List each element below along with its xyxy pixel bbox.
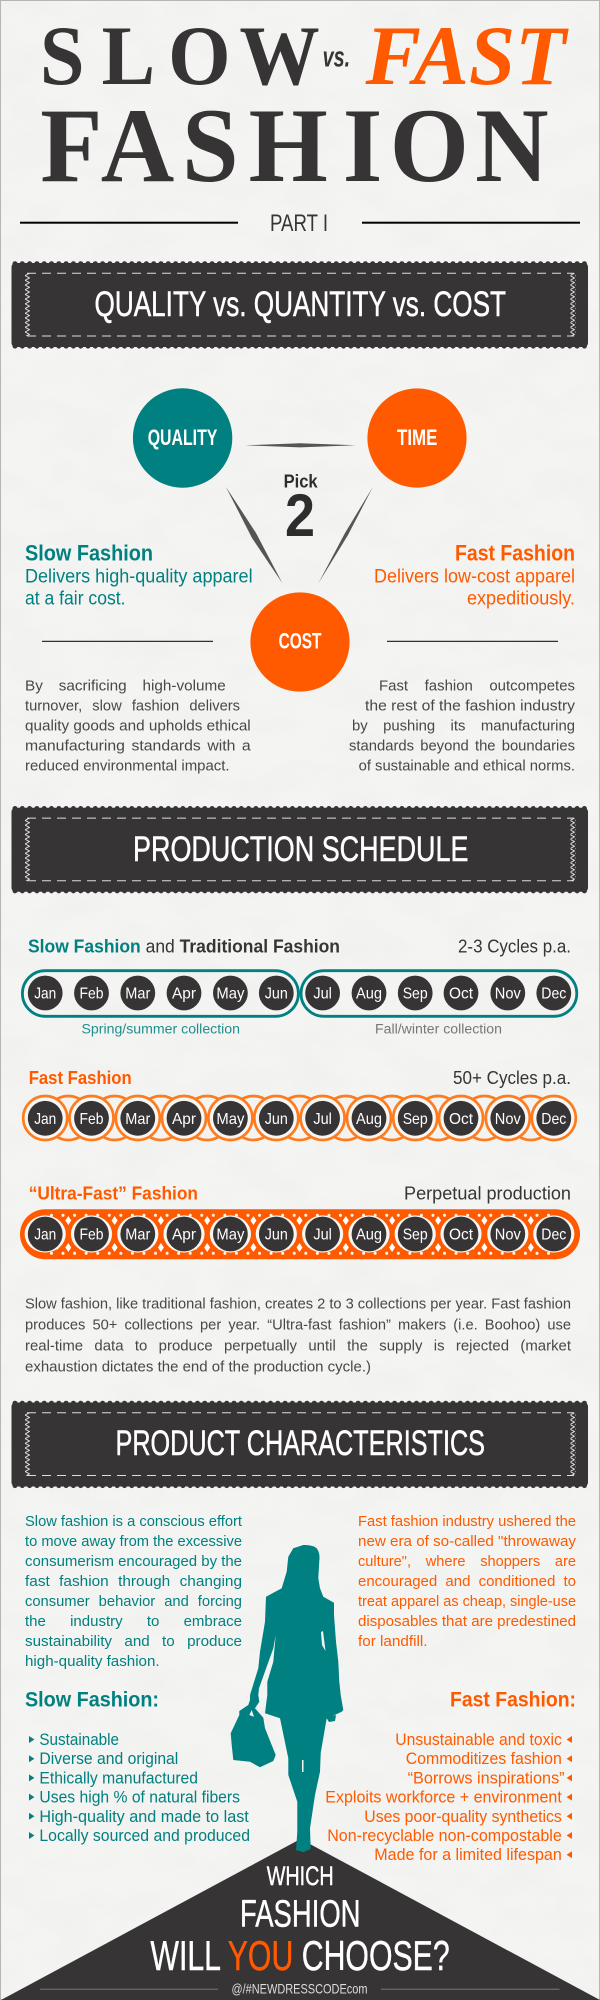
calendar row: fast fashion: Oct bbox=[449, 1111, 474, 1128]
slow fashion list: Ethically manufactured bbox=[39, 1769, 198, 1787]
fast fashion summary: Delivers low-cost apparel bbox=[374, 567, 575, 588]
calendar row: ultra-fast fashion: Oct bbox=[449, 1227, 474, 1244]
title word: SLOW: SLOW bbox=[40, 9, 320, 102]
calendar row: ultra-fast fashion: Jun bbox=[265, 1227, 288, 1244]
connector: quality to cost bbox=[226, 487, 282, 583]
fast fashion intro paragraph: encouraged and conditioned to bbox=[358, 1573, 576, 1590]
cycle count: 50+: 50+ Cycles p.a. bbox=[453, 1067, 571, 1088]
title: fashion: FASHION bbox=[40, 87, 549, 204]
calendar row: fast fashion: May bbox=[216, 1111, 244, 1128]
calendar row: ultra-fast fashion: Apr bbox=[172, 1227, 197, 1244]
production label: perpetual: Perpetual production bbox=[404, 1182, 571, 1203]
part label with rules: PART I bbox=[270, 210, 328, 237]
calendar row: fast fashion bbox=[23, 1096, 576, 1140]
closing question: WHICH bbox=[267, 1861, 334, 1891]
closing triangle panel bbox=[1, 1839, 600, 2000]
production schedule paragraph: produces 50+ collections per year. “Ultra-fast fashion” makers (i.e. Boohoo) use bbox=[25, 1317, 571, 1333]
fast fashion list: Unsustainable and toxic bbox=[395, 1731, 562, 1749]
calendar row: ultra-fast fashion: Jul bbox=[313, 1227, 332, 1244]
calendar row: slow fashion: Mar bbox=[125, 986, 151, 1003]
circle: cost bbox=[250, 592, 350, 692]
production schedule paragraph: Slow fashion, like traditional fashion, creates 2 to 3 collections per year. Fast fashion bbox=[25, 1296, 571, 1312]
title word: FAST: FAST bbox=[365, 10, 569, 103]
fast fashion paragraph: of sustainable and ethical norms. bbox=[359, 759, 575, 775]
fast fashion intro paragraph bbox=[358, 1513, 576, 1650]
heading banner: production schedule: PRODUCTION SCHEDULE bbox=[133, 830, 468, 869]
circle: time bbox=[367, 388, 467, 488]
heading banner: product characteristics bbox=[12, 1402, 588, 1486]
label: spring/summer: Spring/summer collection bbox=[82, 1021, 240, 1036]
heading banner: production schedule bbox=[12, 808, 588, 892]
fast fashion list: Made for a limited lifespan bbox=[374, 1846, 562, 1864]
fast fashion summary: Fast Fashion bbox=[455, 541, 575, 566]
slow fashion paragraph: turnover, slow fashion delivers bbox=[25, 699, 240, 715]
calendar row: fast fashion: Sep bbox=[403, 1111, 428, 1128]
calendar row: slow fashion: Apr bbox=[172, 986, 197, 1003]
production schedule paragraph: real-time data to produce perpetually until the supply is rejected (market bbox=[25, 1338, 571, 1354]
fast fashion intro paragraph: Fast fashion industry ushered the bbox=[358, 1513, 576, 1530]
icon: woman silhouette with shopping bag bbox=[231, 1545, 343, 1852]
slow fashion intro paragraph: fast fashion through changing bbox=[25, 1573, 242, 1590]
heading banner: quality vs quantity vs cost bbox=[12, 263, 588, 347]
slow fashion paragraph: quality goods and upholds ethical bbox=[25, 719, 251, 735]
calendar row: ultra-fast fashion: Nov bbox=[495, 1227, 521, 1244]
calendar row: slow fashion: May bbox=[216, 986, 244, 1003]
calendar row: fast fashion: Nov bbox=[495, 1111, 521, 1128]
fast fashion intro paragraph: for landfill. bbox=[358, 1633, 428, 1650]
calendar row: fast fashion: Jul bbox=[313, 1111, 332, 1128]
slow fashion intro paragraph: consumerism encouraged by the bbox=[25, 1553, 242, 1570]
calendar row: fast fashion: Feb bbox=[80, 1111, 104, 1128]
fast fashion list: Uses poor-quality synthetics bbox=[364, 1808, 562, 1826]
circle: cost: COST bbox=[279, 629, 322, 654]
fast fashion paragraph: the rest of the fashion industry bbox=[365, 699, 576, 715]
calendar row: ultra-fast fashion: Mar bbox=[125, 1227, 151, 1244]
calendar row: slow fashion: Feb bbox=[80, 986, 104, 1003]
calendar row: slow fashion: Sep bbox=[403, 986, 428, 1003]
calendar row: fast fashion: Jun bbox=[265, 1111, 288, 1128]
calendar row: slow fashion: Jul bbox=[313, 986, 332, 1003]
slow fashion intro paragraph: sustainability and to produce bbox=[25, 1633, 242, 1650]
production schedule paragraph: exhaustion dictates the end of the production cycle.) bbox=[25, 1359, 371, 1375]
fast fashion intro paragraph: new era of so-called "throwaway bbox=[358, 1533, 576, 1550]
fast fashion paragraph bbox=[349, 679, 576, 775]
title: slow vs fast bbox=[40, 9, 569, 103]
slow fashion summary: Delivers high-quality apparel bbox=[25, 567, 253, 588]
closing question: WILL YOU CHOOSE? bbox=[150, 1932, 450, 1979]
slow fashion list: Diverse and original bbox=[39, 1750, 178, 1768]
calendar row: slow fashion: Jan bbox=[34, 986, 56, 1003]
calendar row: ultra-fast fashion: May bbox=[216, 1227, 244, 1244]
fast fashion list: “Borrows inspirations” bbox=[408, 1769, 565, 1787]
label: fall/winter: Fall/winter collection bbox=[375, 1021, 502, 1036]
slow fashion paragraph bbox=[25, 679, 252, 775]
row heading: ultra-fast fashion: “Ultra-Fast” Fashion bbox=[29, 1183, 198, 1203]
slow fashion list bbox=[29, 1731, 250, 1845]
pick number: 2 bbox=[285, 482, 315, 549]
slow fashion list: Locally sourced and produced bbox=[39, 1827, 250, 1845]
fast fashion summary: expeditiously. bbox=[467, 588, 575, 609]
row heading: slow and traditional: Slow Fashion and Traditional Fashion bbox=[28, 937, 340, 957]
slow fashion paragraph: reduced environmental impact. bbox=[25, 759, 230, 775]
slow fashion intro paragraph: Slow fashion is a conscious effort bbox=[25, 1513, 243, 1530]
fast fashion list bbox=[325, 1731, 572, 1864]
calendar row: ultra-fast fashion bbox=[20, 1209, 580, 1259]
list heading: fast fashion: Fast Fashion: bbox=[450, 1689, 576, 1712]
footer handle: @/#NEWDRESSCODEcom bbox=[232, 1980, 368, 1996]
list heading: slow fashion: Slow Fashion: bbox=[25, 1689, 159, 1712]
fast fashion intro paragraph: culture", where shoppers are bbox=[358, 1553, 576, 1570]
slow fashion summary: Slow Fashion bbox=[25, 541, 153, 566]
calendar row: slow fashion: Aug bbox=[356, 986, 382, 1003]
fast fashion list: Exploits workforce + environment bbox=[325, 1789, 562, 1807]
production schedule paragraph bbox=[25, 1296, 571, 1375]
connector: time to cost bbox=[318, 487, 373, 583]
calendar row: slow fashion: Jun bbox=[265, 986, 288, 1003]
calendar row: ultra-fast fashion: Aug bbox=[356, 1227, 382, 1244]
slow fashion intro paragraph: the industry to embrace bbox=[25, 1613, 242, 1630]
calendar row: ultra-fast fashion: Sep bbox=[403, 1227, 428, 1244]
circle: quality: QUALITY bbox=[148, 425, 218, 450]
title word: vs.: vs. bbox=[323, 42, 350, 74]
calendar row: slow fashion: Dec bbox=[541, 986, 566, 1003]
circle: quality bbox=[133, 388, 232, 488]
fast fashion intro paragraph: treat apparel as cheap, single-use bbox=[358, 1593, 576, 1610]
slow fashion list: High-quality and made to last bbox=[39, 1808, 249, 1826]
slow fashion intro paragraph: consumer behavior and forcing bbox=[25, 1593, 242, 1610]
slow fashion paragraph: manufacturing standards with a bbox=[25, 739, 252, 755]
calendar row: ultra-fast fashion: Jan bbox=[34, 1227, 56, 1244]
calendar row: slow fashion bbox=[22, 971, 577, 1016]
slow fashion paragraph: By sacrificing high-volume bbox=[25, 679, 226, 695]
fast fashion paragraph: by pushing its manufacturing bbox=[352, 719, 575, 735]
fast fashion list: Commoditizes fashion bbox=[406, 1750, 562, 1768]
icon: shopping bag bbox=[231, 1698, 276, 1767]
slow fashion intro paragraph bbox=[25, 1513, 243, 1670]
slow fashion list: Uses high % of natural fibers bbox=[39, 1789, 240, 1807]
fast fashion intro paragraph: disposables that are predestined bbox=[358, 1613, 576, 1630]
pick label: Pick bbox=[284, 470, 318, 491]
cycle count: 2-3: 2-3 Cycles p.a. bbox=[458, 936, 571, 957]
pick two triangle diagram bbox=[133, 388, 467, 692]
calendar row: fast fashion: Aug bbox=[356, 1111, 382, 1128]
slow fashion list: Sustainable bbox=[39, 1731, 119, 1749]
calendar row: fast fashion: Jan bbox=[34, 1111, 56, 1128]
calendar row: fast fashion: Apr bbox=[172, 1111, 197, 1128]
fast fashion paragraph: standards beyond the boundaries bbox=[349, 739, 575, 755]
calendar row: ultra-fast fashion: Feb bbox=[80, 1227, 104, 1244]
slow fashion summary bbox=[25, 541, 253, 609]
calendar row: ultra-fast fashion: Dec bbox=[541, 1227, 566, 1244]
calendar row: slow fashion: Nov bbox=[495, 986, 521, 1003]
calendar row: fast fashion: Mar bbox=[125, 1111, 151, 1128]
row heading: fast fashion: Fast Fashion bbox=[29, 1068, 132, 1088]
calendar row: slow fashion: Oct bbox=[449, 986, 474, 1003]
fast fashion summary bbox=[374, 541, 575, 609]
slow fashion summary: at a fair cost. bbox=[25, 588, 126, 609]
closing question: FASHION bbox=[240, 1894, 360, 1936]
closing question bbox=[150, 1861, 450, 1979]
fast fashion paragraph: Fast fashion outcompetes bbox=[379, 679, 575, 695]
slow fashion intro paragraph: to move away from the excessive bbox=[25, 1533, 242, 1550]
calendar row: fast fashion: Dec bbox=[541, 1111, 566, 1128]
slow fashion intro paragraph: high-quality fashion. bbox=[25, 1653, 160, 1670]
fast fashion list: Non-recyclable non-compostable bbox=[327, 1827, 562, 1845]
connector: quality to time bbox=[245, 443, 356, 447]
circle: time: TIME bbox=[397, 425, 437, 450]
